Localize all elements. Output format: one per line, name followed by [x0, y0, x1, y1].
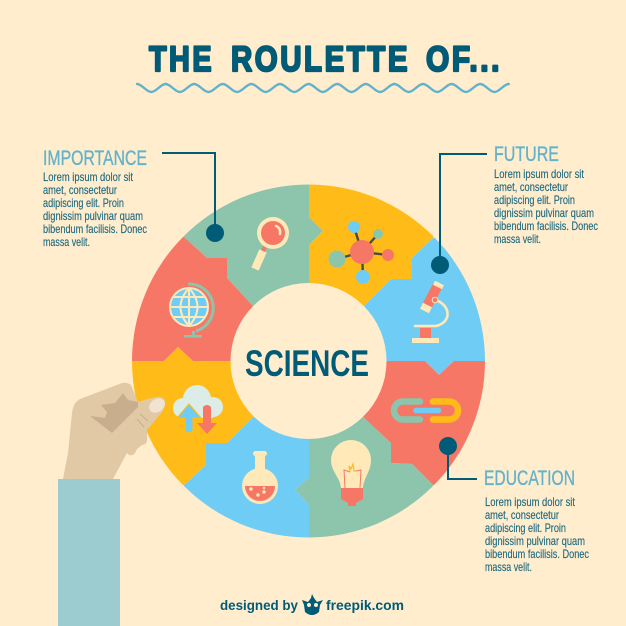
connector: importance	[162, 153, 224, 242]
icon: flask	[242, 451, 278, 504]
roulette wheel	[132, 184, 485, 538]
text block: importance: amet, consectetur	[43, 183, 117, 197]
text block: future: Lorem ipsum dolor sit	[494, 167, 585, 181]
text block: future: dignissim pulvinar quam	[494, 206, 594, 220]
title: ROULETTE	[231, 40, 410, 79]
icon: globe	[170, 284, 213, 338]
text block: future: massa velit.	[494, 232, 541, 246]
panel: importance text	[43, 147, 147, 249]
connector: education	[439, 437, 477, 479]
text block: education: bibendum facilisis. Donec	[485, 547, 589, 561]
title: OF...	[426, 40, 502, 79]
text block: importance: massa velit.	[43, 235, 90, 249]
panel: future text	[494, 143, 598, 246]
text block: education: dignissim pulvinar quam	[485, 534, 585, 548]
text block: importance: dignissim pulvinar quam	[43, 209, 143, 223]
text block: education	[485, 495, 589, 574]
hand shadow	[90, 393, 138, 433]
text block: future: bibendum facilisis. Donec	[494, 219, 598, 233]
text block: importance	[43, 170, 147, 249]
icon: chain links	[394, 402, 458, 420]
segment: red upper-left	[132, 236, 253, 361]
segment: blue right	[364, 238, 485, 375]
text block: education: massa velit.	[485, 560, 532, 574]
text block: education: amet, consectetur	[485, 508, 559, 522]
hand	[63, 383, 165, 479]
text block: education: adipiscing elit. Proin	[485, 521, 566, 535]
icon: microscope	[412, 283, 448, 343]
text block: importance: bibendum facilisis. Donec	[43, 222, 147, 236]
icon: molecule	[328, 221, 394, 284]
heading: future: FUTURE	[494, 143, 559, 166]
thumbnail	[146, 395, 168, 416]
text block: future: adipiscing elit. Proin	[494, 193, 575, 207]
segment: red lower-right	[363, 361, 485, 486]
thumb creases	[137, 414, 148, 427]
centre label: SCIENCE	[245, 343, 369, 384]
footer credit: freepik.com	[326, 597, 404, 613]
segment: yellow top-right	[309, 184, 434, 306]
panel: education text	[484, 467, 589, 574]
text block: importance: adipiscing elit. Proin	[43, 196, 124, 210]
sleeve	[58, 479, 120, 626]
heading: education: EDUCATION	[484, 467, 575, 490]
centre hub	[230, 283, 386, 439]
icon: freepik logo	[302, 594, 323, 615]
text block: future: amet, consectetur	[494, 180, 568, 194]
illustration: hand with sleeve	[58, 383, 168, 626]
segment: green top-left	[184, 184, 323, 306]
wavy underline	[137, 84, 509, 92]
icon: light bulb	[331, 440, 371, 506]
icon: magnifying glass	[255, 217, 289, 269]
footer credit: designed by	[220, 597, 298, 613]
connector: future	[431, 154, 487, 274]
icon: cloud with arrows	[173, 385, 223, 434]
text block: education: Lorem ipsum dolor sit	[485, 495, 576, 509]
title	[149, 40, 502, 79]
segment: green bottom	[295, 416, 434, 538]
title: THE	[149, 40, 214, 79]
segment: yellow left	[132, 347, 254, 486]
segment: blue bottom-left	[184, 416, 309, 538]
footer credit	[220, 594, 404, 615]
text block: future	[494, 167, 598, 246]
heading: importance: IMPORTANCE	[43, 147, 147, 170]
text block: importance: Lorem ipsum dolor sit	[43, 170, 134, 184]
